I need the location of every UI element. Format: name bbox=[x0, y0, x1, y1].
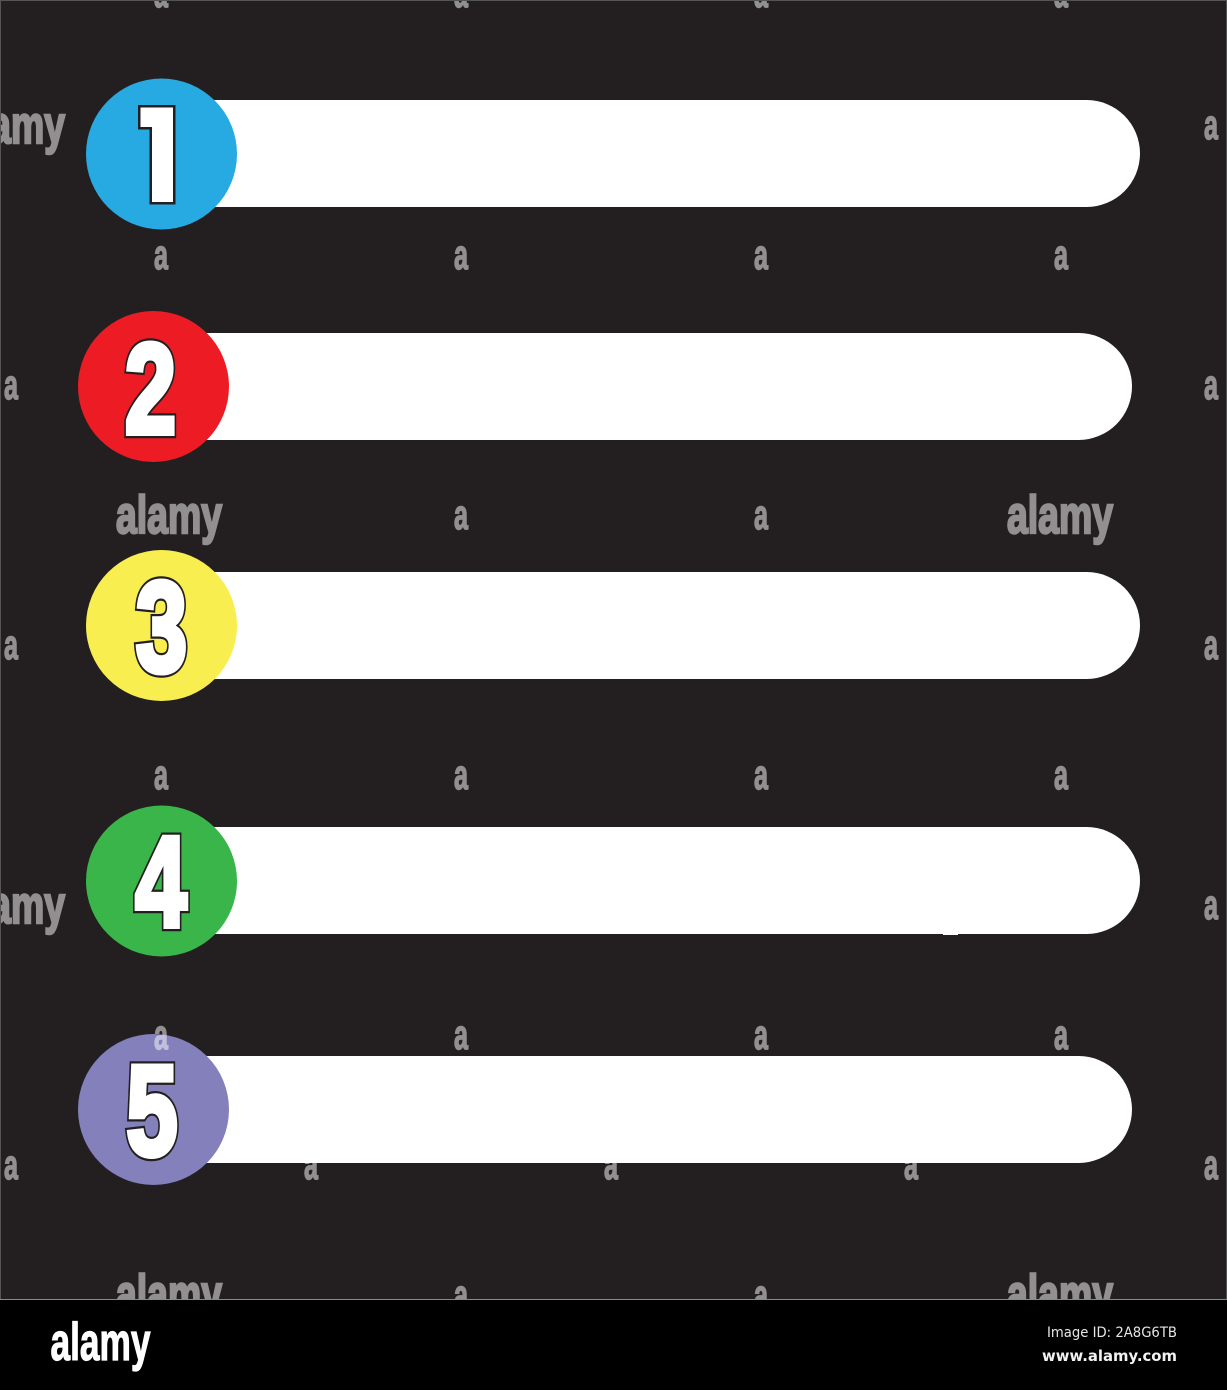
watermark letters: a bbox=[4, 621, 18, 668]
list row 4 bbox=[86, 806, 1140, 956]
number badge 2 bbox=[78, 311, 229, 462]
watermark letters: a bbox=[604, 1141, 618, 1188]
number badge 2: 2 bbox=[125, 317, 176, 461]
watermark letters: a bbox=[154, 1011, 168, 1058]
number badge 4: 4 bbox=[135, 810, 187, 954]
watermark letters: a bbox=[4, 361, 18, 408]
number badge 5: 5 bbox=[126, 1039, 178, 1183]
watermark wordmarks: alamy bbox=[116, 486, 222, 545]
list row 1 bbox=[86, 78, 1140, 230]
watermark letters: a bbox=[1204, 621, 1218, 668]
watermark letters: a bbox=[1204, 881, 1218, 928]
list row 3 bbox=[86, 550, 1140, 701]
watermark letters: a bbox=[154, 231, 168, 278]
image id: Image ID: 2A8G6TB bbox=[1047, 1325, 1177, 1341]
watermark letters: a bbox=[754, 1271, 768, 1318]
watermark letters: a bbox=[754, 231, 768, 278]
number badge 3: 3 bbox=[136, 555, 187, 699]
bar 3 bbox=[160, 572, 1140, 679]
list row 2 bbox=[78, 311, 1132, 462]
watermark letters: a bbox=[1204, 101, 1218, 148]
watermark letters: a bbox=[1054, 231, 1068, 278]
watermark wordmarks: alamy bbox=[1007, 1265, 1113, 1324]
watermark wordmarks: alamy bbox=[1007, 486, 1113, 545]
watermark letters: a bbox=[454, 231, 468, 278]
watermark letters: a bbox=[1054, 751, 1068, 798]
list row 5 bbox=[78, 1034, 1132, 1185]
number badge 5 bbox=[78, 1034, 229, 1185]
website: www.alamy.com bbox=[1042, 1347, 1177, 1365]
number badge 4: 4 bbox=[135, 810, 187, 954]
watermark letters: a bbox=[454, 1271, 468, 1318]
bar 1 bbox=[160, 100, 1140, 207]
number badge 3 bbox=[86, 550, 237, 701]
footer logo: alamy bbox=[50, 1313, 151, 1372]
watermark wordmarks: alamy bbox=[116, 1265, 222, 1324]
watermark letters: a bbox=[454, 491, 468, 538]
watermark letters: a bbox=[1054, 1011, 1068, 1058]
watermark letters: a bbox=[304, 1141, 318, 1188]
watermark letters: a bbox=[1204, 1141, 1218, 1188]
watermark letters: a bbox=[1204, 361, 1218, 408]
bar 5 bbox=[152, 1056, 1132, 1163]
watermark letters: a bbox=[4, 1141, 18, 1188]
watermark letters: a bbox=[754, 751, 768, 798]
bar 4 bbox=[160, 827, 1140, 935]
number badge 1: 1 bbox=[129, 82, 185, 225]
footer band bbox=[0, 1299, 1227, 1390]
number badge 1 bbox=[86, 78, 237, 230]
watermark letters: a bbox=[454, 751, 468, 798]
watermark letters: a bbox=[154, 751, 168, 798]
number badge 4 bbox=[86, 806, 237, 956]
watermark letters: a bbox=[904, 1141, 918, 1188]
bar 2 bbox=[152, 333, 1132, 440]
number badge 5: 5 bbox=[126, 1039, 178, 1183]
number badge 1: 1 bbox=[129, 82, 185, 225]
watermark letters: a bbox=[454, 1011, 468, 1058]
number badge 3: 3 bbox=[136, 555, 187, 699]
number badge 2: 2 bbox=[125, 317, 176, 461]
watermark letters: a bbox=[754, 491, 768, 538]
watermark letters: a bbox=[754, 1011, 768, 1058]
